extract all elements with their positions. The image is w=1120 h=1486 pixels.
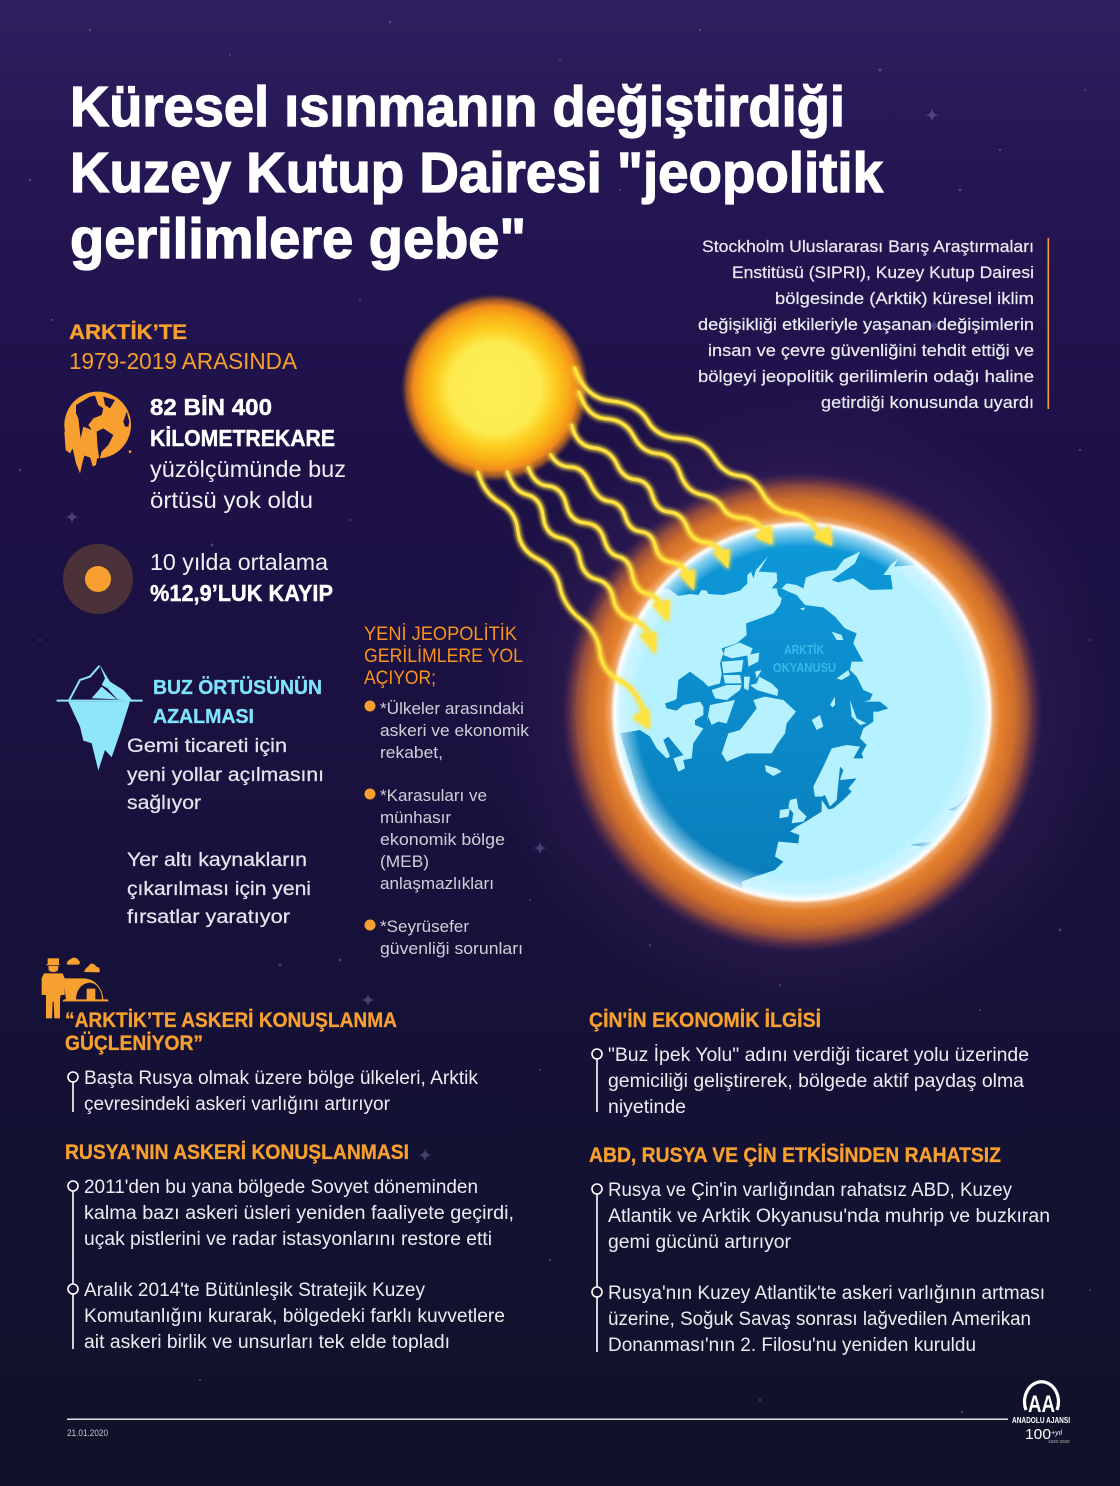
panel: new geopolitical tensions: [364, 624, 530, 958]
intro paragraph: getirdiği konusunda uyardı: [821, 393, 1034, 412]
panel: Arctic military deployment: GÜÇLENİYOR”: [65, 1032, 203, 1055]
icon: iceberg: [57, 664, 143, 771]
panel: decreasing ice cover: yeni yollar açılmasını: [127, 764, 324, 786]
panel: Russian military deployment: [65, 1141, 514, 1353]
label: Arctic Ocean: OKYANUSU: [773, 660, 836, 675]
heading: Arctic 1979-2019: ARKTİK’TE: [69, 321, 187, 344]
panel: new geopolitical tensions: (MEB): [380, 852, 429, 871]
panel: Russian military deployment: kalma bazı askeri üsleri yeniden faaliyete geçirdi,: [84, 1203, 514, 1224]
stat: 12,9 percent loss: 10 yılda ortalama: [150, 549, 328, 575]
intro paragraph: [698, 237, 1049, 412]
footer line and date: 21.01.2020: [67, 1428, 108, 1439]
intro paragraph: Stockholm Uluslararası Barış Araştırmaları: [702, 237, 1034, 256]
title: Kuzey Kutup Dairesi "jeopolitik: [70, 141, 883, 205]
logo: Anadolu Ajansi: 1920-2020: [1048, 1439, 1070, 1444]
logo: Anadolu Ajansi: AA: [1028, 1391, 1055, 1418]
icon: melting globe: [64, 392, 131, 473]
panel: new geopolitical tensions: GERİLİMLERE YOL: [364, 646, 523, 667]
label: Arctic Ocean: [773, 642, 836, 675]
icon: donut marker: [63, 544, 133, 614]
title: [70, 75, 883, 271]
panel: decreasing ice cover: Gemi ticareti için: [127, 735, 287, 757]
logo: Anadolu Ajansi: [1012, 1382, 1070, 1444]
panel: USA uneasy about Russia and China: [589, 1144, 1050, 1356]
stat: 82 bin 400 kilometrekare: yüzölçümünde buz: [150, 456, 346, 482]
panel: USA uneasy about Russia and China: Rusya'nın Kuzey Atlantik'te askeri varlığının artması: [608, 1283, 1045, 1304]
panel: new geopolitical tensions: *Seyrüsefer: [380, 917, 469, 936]
panel: USA uneasy about Russia and China: gemi gücünü artırıyor: [608, 1232, 792, 1253]
panel: Arctic military deployment: çevresindeki askeri varlığını artırıyor: [84, 1094, 391, 1115]
panel: new geopolitical tensions: *Ülkeler arasındaki: [380, 699, 524, 718]
panel: new geopolitical tensions: münhasır: [380, 808, 451, 827]
stat: 82 bin 400 kilometrekare: 82 BİN 400: [150, 394, 272, 420]
panel: new geopolitical tensions: ekonomik bölge: [380, 830, 505, 849]
illustration: earth with orange glow: [536, 406, 1068, 982]
panel: Russian military deployment: Komutanlığını kurarak, bölgedeki farklı kuvvetlere: [84, 1306, 505, 1327]
intro paragraph: bölgesinde (Arktik) küresel iklim: [775, 289, 1034, 308]
stat: 82 bin 400 kilometrekare: KİLOMETREKARE: [150, 425, 335, 451]
panel: new geopolitical tensions: güvenliği sorunları: [380, 939, 523, 958]
panel: USA uneasy about Russia and China: Atlantik ve Arktik Okyanusu'nda muhrip ve buzkıran: [608, 1206, 1050, 1227]
stat: 12,9 percent loss: [150, 549, 333, 606]
panel: Russian military deployment: ait askeri birlik ve unsurları tek elde topladı: [84, 1332, 450, 1353]
title: Küresel ısınmanın değiştirdiği: [70, 75, 845, 139]
heading: Arctic 1979-2019: [69, 321, 298, 374]
panel: Arctic military deployment: Başta Rusya olmak üzere bölge ülkeleri, Arktik: [84, 1068, 479, 1089]
panel: USA uneasy about Russia and China: ABD, RUSYA VE ÇİN ETKİSİNDEN RAHATSIZ: [589, 1144, 1001, 1167]
logo: Anadolu Ajansi: 100: [1025, 1426, 1051, 1443]
title: gerilimlere gebe": [70, 207, 526, 271]
panel: China's economic interest: niyetinde: [608, 1097, 686, 1118]
heading: Arctic 1979-2019: 1979-2019 ARASINDA: [69, 348, 298, 374]
panel: decreasing ice cover: [127, 676, 324, 928]
intro paragraph: değişikliği etkileriyle yaşanan değişimlerin: [698, 315, 1034, 334]
panel: decreasing ice cover: BUZ ÖRTÜSÜNÜN: [153, 676, 322, 699]
panel: new geopolitical tensions: YENİ JEOPOLİTİK: [364, 624, 517, 645]
logo: Anadolu Ajansi: ANADOLU AJANSI: [1012, 1415, 1070, 1425]
panel: China's economic interest: ÇİN'İN EKONOMİK İLGİSİ: [589, 1009, 821, 1032]
panel: China's economic interest: "Buz İpek Yolu" adını verdiği ticaret yolu üzerinde: [608, 1045, 1029, 1066]
intro paragraph: bölgeyi jeopolitik gerilimlerin odağı haline: [698, 367, 1034, 386]
panel: decreasing ice cover: sağlıyor: [127, 792, 202, 814]
intro paragraph: Enstitüsü (SIPRI), Kuzey Kutup Dairesi: [732, 263, 1034, 282]
panel: new geopolitical tensions: AÇIYOR;: [364, 668, 436, 689]
panel: decreasing ice cover: fırsatlar yaratıyor: [127, 906, 291, 928]
panel: USA uneasy about Russia and China: Donanması'nın 2. Filosu'nu yeniden kuruldu: [608, 1335, 976, 1356]
icon: soldier and military base: [42, 958, 108, 1018]
panel: Russian military deployment: RUSYA'NIN ASKERİ KONUŞLANMASI: [65, 1141, 409, 1164]
panel: China's economic interest: [589, 1009, 1029, 1118]
panel: decreasing ice cover: AZALMASI: [153, 706, 254, 728]
panel: Russian military deployment: 2011'den bu yana bölgede Sovyet döneminden: [84, 1177, 478, 1198]
logo: Anadolu Ajansi: +yıl: [1051, 1430, 1063, 1437]
intro paragraph: insan ve çevre güvenliğini tehdit ettiği ve: [708, 341, 1034, 360]
panel: new geopolitical tensions: anlaşmazlıkları: [380, 874, 494, 893]
stat: 82 bin 400 kilometrekare: örtüsü yok oldu: [150, 487, 313, 513]
stat: 82 bin 400 kilometrekare: [150, 394, 346, 513]
panel: USA uneasy about Russia and China: üzerine, Soğuk Savaş sonrası lağvedilen Amerikan: [608, 1309, 1031, 1330]
panel: Russian military deployment: Aralık 2014'te Bütünleşik Stratejik Kuzey: [84, 1280, 425, 1301]
panel: decreasing ice cover: Yer altı kaynakların: [127, 849, 307, 871]
panel: new geopolitical tensions: *Karasuları ve: [380, 786, 487, 805]
panel: Russian military deployment: uçak pistlerini ve radar istasyonlarını restore etti: [84, 1229, 492, 1250]
panel: new geopolitical tensions: askeri ve ekonomik: [380, 721, 530, 740]
illustration: wavy sun rays with arrows: [478, 368, 832, 729]
panel: new geopolitical tensions: rekabet,: [380, 743, 443, 762]
panel: Arctic military deployment: [65, 1009, 479, 1115]
label: Arctic Ocean: ARKTİK: [784, 642, 824, 657]
panel: China's economic interest: gemiciliği geliştirerek, bölgede aktif paydaş olma: [608, 1071, 1024, 1092]
panel: decreasing ice cover: çıkarılması için yeni: [127, 878, 311, 900]
stat: 12,9 percent loss: %12,9’LUK KAYIP: [150, 580, 333, 606]
illustration: sun: [401, 294, 589, 482]
panel: Arctic military deployment: “ARKTİK’TE ASKERİ KONUŞLANMA: [65, 1009, 397, 1032]
panel: USA uneasy about Russia and China: Rusya ve Çin'in varlığından rahatsız ABD, Kuzey: [608, 1180, 1012, 1201]
